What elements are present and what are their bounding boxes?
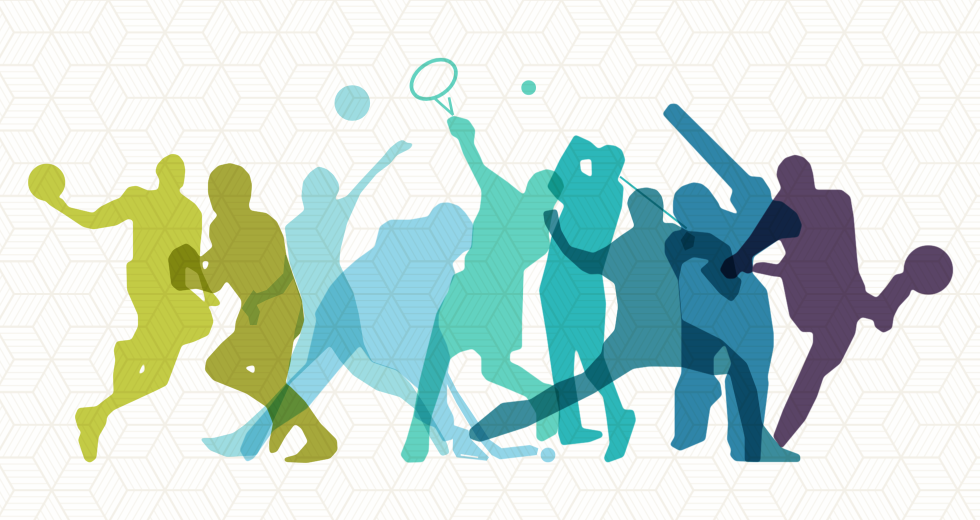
golf club grip — [681, 232, 695, 251]
figure: basketball player with ball (lime) — [28, 154, 221, 463]
figure: cricket batter with bat (blue) — [663, 104, 802, 462]
hockey blade — [453, 425, 489, 461]
golf club shaft — [620, 177, 687, 228]
figure: bowler with ball (purple) — [720, 155, 953, 448]
racket head — [404, 51, 463, 107]
ball: bowler cricket ball — [334, 85, 370, 121]
hockey stick — [445, 367, 538, 459]
figure: cricket bowler (pale blue) — [200, 140, 449, 457]
racket throat — [435, 97, 453, 115]
tennis ball — [521, 80, 536, 95]
figure: hockey player with stick (sky blue) — [240, 203, 555, 462]
figure: baseball pitcher lunging (dark teal) — [469, 188, 800, 462]
puck ball — [541, 448, 555, 462]
figure: tennis player with racket (mint) — [401, 51, 564, 462]
figure: golfer (teal) — [539, 135, 695, 463]
figure: basketball defender (olive) — [168, 163, 337, 463]
olive defender shaded arm — [242, 255, 304, 340]
